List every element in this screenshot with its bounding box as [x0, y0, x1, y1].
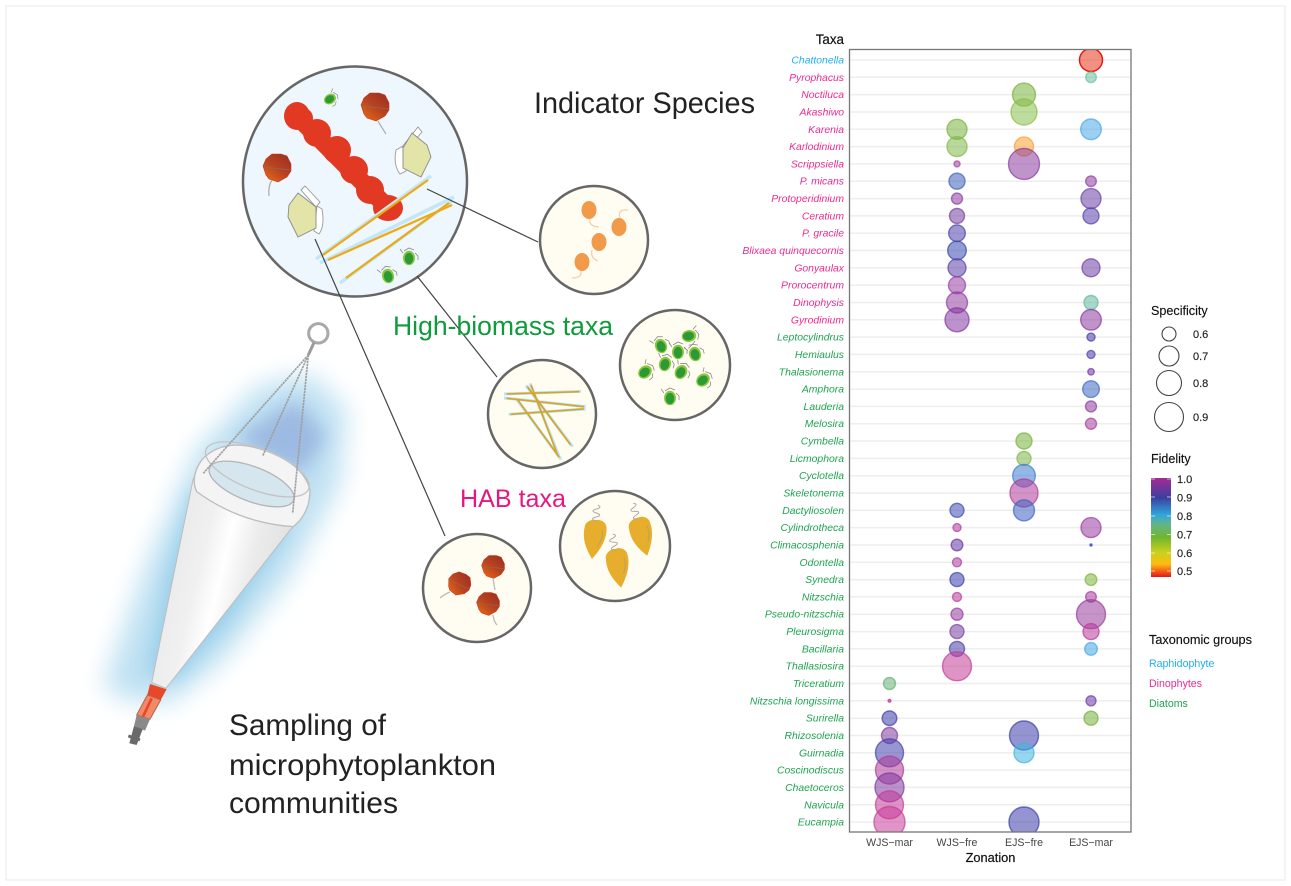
- taxa labels: diatoms: Cymbella: [801, 436, 844, 448]
- x axis labels: EJS−fre: [1005, 837, 1043, 849]
- legend: taxonomic groups: Diatoms: [1149, 698, 1188, 710]
- taxa labels: diatoms: Surirella: [806, 714, 844, 725]
- taxa labels: diatoms: Skeletonema: [783, 488, 844, 500]
- x axis title: Zonation: [966, 850, 1015, 865]
- caption: sampling: microphytoplankton: [229, 749, 496, 782]
- taxa labels: diatoms: Coscinodiscus: [777, 766, 844, 777]
- circle: diatom needles: [488, 360, 596, 468]
- circle: yellow dinoflagellates: [560, 491, 670, 601]
- x axis labels: WJS−mar: [866, 837, 913, 849]
- taxa labels: dinophytes: Prorocentrum: [781, 281, 844, 292]
- illustration: plankton net: [103, 324, 347, 745]
- legend: fidelity colour bar: 0.8: [1177, 511, 1192, 523]
- taxa labels: diatoms: Licmophora: [790, 454, 844, 465]
- caption: sampling: [229, 709, 496, 820]
- diatom needles: [316, 176, 454, 283]
- legend: specificity: 0.8: [1193, 378, 1208, 390]
- connector lines: [315, 189, 538, 536]
- taxa labels: diatoms: Lauderia: [804, 402, 844, 413]
- red chain-forming cells: [284, 102, 403, 221]
- taxa labels: dinophytes: P. gracile: [802, 229, 844, 240]
- taxa labels: dinophytes: Noctiluca: [801, 90, 844, 101]
- suspension ring: [308, 324, 328, 355]
- legend: fidelity colour bar: Fidelity: [1151, 452, 1191, 466]
- taxa labels: dinophytes: Gyrodinium: [791, 315, 844, 326]
- taxa labels: dinophytes: Blixaea quinquecornis: [742, 246, 844, 257]
- taxa labels: diatoms: Pleurosigma: [786, 627, 844, 638]
- taxa labels: diatoms: Thallasiosira: [786, 662, 844, 673]
- pale armoured cells: [288, 127, 431, 237]
- taxa labels: diatoms: Leptocylindrus: [777, 333, 844, 344]
- legend: specificity: Specificity: [1151, 304, 1208, 318]
- taxa labels: diatoms: Thalasionema: [779, 367, 844, 378]
- taxa labels: diatoms: Chaetoceros: [785, 783, 844, 794]
- taxa labels: dinophytes: P. micans: [800, 177, 844, 188]
- taxa labels: dinophytes: [742, 73, 845, 326]
- legend: taxonomic groups: Taxonomic groups: [1149, 633, 1252, 647]
- heading: Indicator Species: Indicator Species: [534, 87, 755, 120]
- net ring: [194, 430, 316, 527]
- taxa labels: diatoms: Rhizosolenia: [784, 731, 844, 742]
- legend: taxonomic groups: Dinophytes: [1149, 678, 1202, 690]
- legend: taxonomic groups: [1149, 633, 1252, 710]
- taxa labels: diatoms: Cyclotella: [799, 471, 844, 482]
- taxa labels: diatoms: Melosira: [805, 419, 844, 430]
- taxa labels: dinophytes: Dinophysis: [793, 298, 844, 309]
- legend: fidelity colour bar: [1151, 452, 1192, 578]
- taxa labels: dinophytes: Karlodinium: [789, 142, 844, 153]
- heading: HAB taxa: HAB taxa: [460, 485, 566, 513]
- taxa labels: diatoms: Nitzschia longissima: [750, 696, 844, 707]
- circle: red dinoflagellates: [423, 534, 531, 642]
- taxa labels: dinophytes: Protoperidinium: [771, 194, 844, 205]
- taxa labels: diatoms: Eucampia: [798, 818, 844, 829]
- legend: fidelity colour bar: 1.0: [1177, 474, 1192, 486]
- magnified sample circle: [243, 66, 467, 296]
- taxa labels: dinophytes: Karenia: [808, 125, 844, 136]
- taxa labels: diatoms: Guirnadia: [799, 748, 844, 759]
- taxa labels: dinophytes: Pyrophacus: [789, 73, 844, 84]
- legend: specificity: 0.7: [1193, 351, 1208, 363]
- taxa labels: diatoms: [750, 333, 844, 829]
- taxa labels: diatoms: Dactyliosolen: [782, 506, 844, 517]
- legend: specificity: [1151, 304, 1208, 432]
- taxa labels: diatoms: Odontella: [800, 558, 844, 569]
- x axis labels: WJS−fre: [937, 837, 978, 849]
- x axis labels: EJS−mar: [1069, 837, 1113, 849]
- legend: specificity: 0.9: [1193, 412, 1208, 424]
- y axis title: Taxa: [816, 32, 845, 47]
- taxa labels: dinophytes: Gonyaulax: [794, 263, 845, 274]
- taxa labels: diatoms: Triceratium: [793, 679, 844, 690]
- taxa labels: dinophytes: Ceratium: [802, 211, 844, 222]
- caption: sampling: Sampling of: [229, 709, 387, 742]
- taxa labels: diatoms: Navicula: [804, 800, 844, 811]
- taxa labels: diatoms: Bacillaria: [802, 644, 844, 655]
- taxa labels: diatoms: Synedra: [805, 575, 844, 586]
- water glow behind net: [103, 373, 347, 703]
- chart gridlines: [850, 60, 1131, 822]
- cod end: [128, 684, 167, 745]
- legend: taxonomic groups: Raphidophyte: [1149, 658, 1214, 670]
- suspension chains: [203, 355, 308, 513]
- chart frame: [850, 50, 1131, 832]
- taxa labels: diatoms: Climacosphenia: [770, 540, 844, 552]
- taxa label: raphidophyte: Chattonella: [791, 56, 844, 66]
- heading: High-biomass taxa: High-biomass taxa: [393, 311, 614, 341]
- circle: orange cells: [540, 186, 648, 294]
- taxa labels: diatoms: Cylindrotheca: [780, 523, 844, 534]
- circle: green dinoflagellates: [620, 310, 730, 420]
- green dinoflagellates: [321, 88, 418, 285]
- caption: sampling: communities: [229, 787, 398, 820]
- legend: fidelity colour bar: 0.6: [1177, 548, 1192, 560]
- chart bubbles: [874, 48, 1106, 838]
- x axis labels: [866, 837, 1113, 849]
- legend: fidelity colour bar: 0.5: [1177, 566, 1192, 578]
- legend: specificity: 0.6: [1193, 329, 1208, 341]
- taxa labels: diatoms: Amphora: [801, 385, 844, 396]
- red dinoflagellates: [263, 93, 389, 196]
- legend: fidelity colour bar: 0.9: [1177, 492, 1192, 504]
- taxa labels: diatoms: Pseudo-nitzschia: [765, 610, 844, 621]
- taxa labels: dinophytes: Scrippsiella: [791, 159, 844, 170]
- legend: fidelity colour bar: 0.7: [1177, 530, 1192, 542]
- taxa labels: dinophytes: Akashiwo: [799, 108, 844, 118]
- taxa labels: diatoms: Hemiaulus: [795, 350, 844, 361]
- net cone: [152, 478, 299, 688]
- taxa labels: diatoms: Nitzschia: [802, 592, 844, 603]
- bubble chart: [742, 32, 1131, 865]
